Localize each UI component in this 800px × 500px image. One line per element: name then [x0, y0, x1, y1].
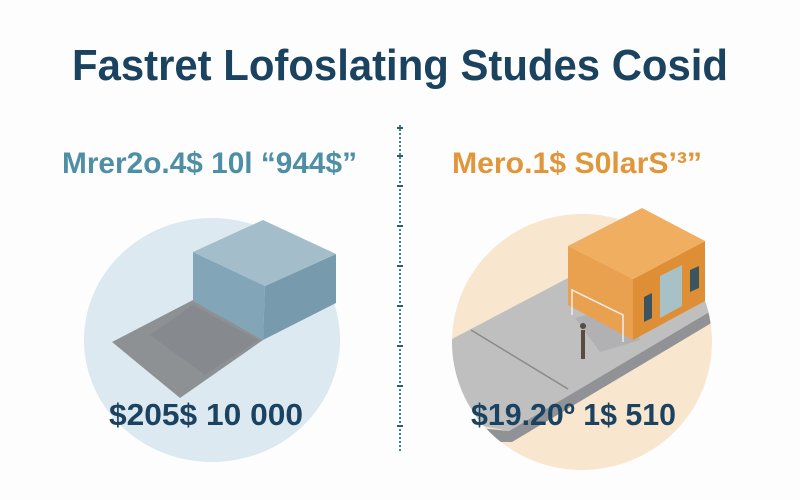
right circle background: [452, 214, 712, 470]
left circle background: [84, 218, 340, 462]
icon: road: [450, 278, 713, 442]
left value: $205$ 10 000: [109, 397, 303, 432]
title: Fastret Lofoslating Studes Cosid: [72, 41, 728, 90]
divider: dotted vertical line: [397, 125, 403, 452]
icon: orange building: [568, 208, 705, 359]
panel: left: [62, 147, 357, 462]
right heading: Mero.1$ S0larS’³”: [452, 147, 702, 180]
panel: right: [450, 147, 713, 470]
left heading: Mrer2o.4$ 10l “944$”: [62, 147, 357, 180]
right value: $19.20º 1$ 510: [471, 397, 676, 432]
icon: grey block with slab: [112, 220, 336, 398]
